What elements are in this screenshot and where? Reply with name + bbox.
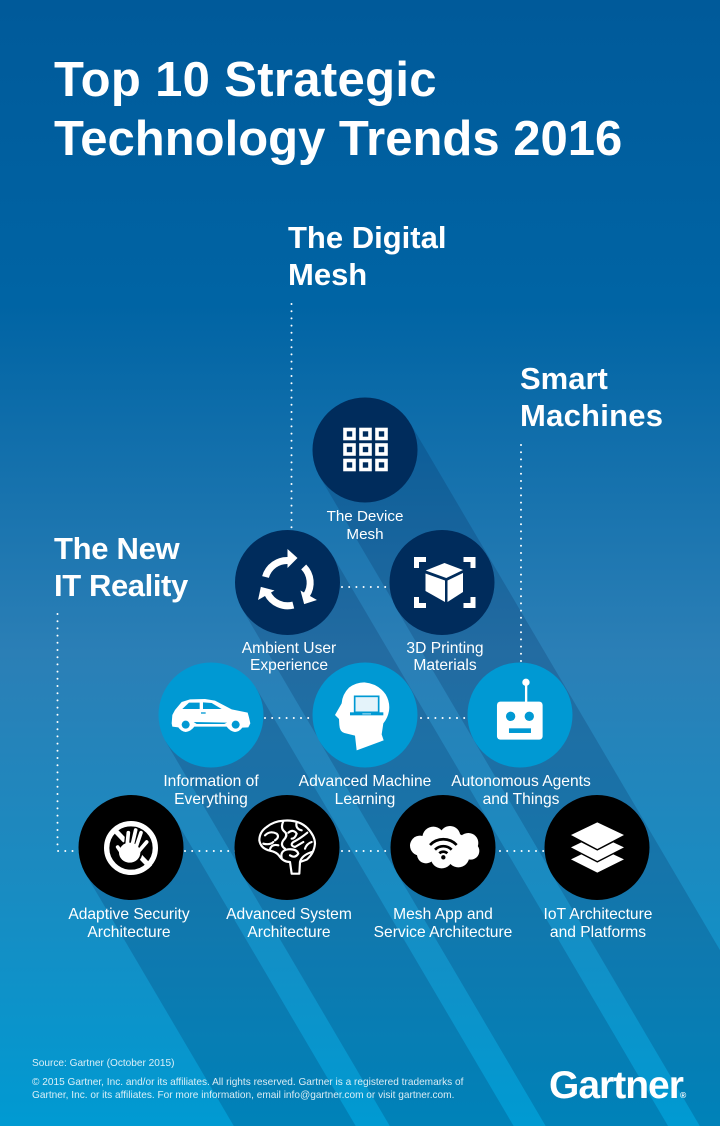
Gartner logo: ® — [680, 1090, 687, 1100]
node: Mesh App and Service Architecture — [374, 795, 512, 941]
node: Ambient User Experience — [235, 530, 340, 674]
node: The Device Mesh — [312, 398, 418, 543]
node: Adaptive Security Architecture: Architecture — [87, 924, 171, 941]
node: IoT Architecture and Platforms: IoT Architecture — [544, 906, 652, 923]
node: Ambient User Experience: Ambient User — [242, 640, 336, 657]
node: 3D Printing Materials — [390, 530, 494, 674]
heading: Smart Machines: Smart — [520, 361, 608, 396]
node: IoT Architecture and Platforms — [544, 795, 652, 941]
copyright note: © 2015 Gartner, Inc. and/or its affiliates. All rights reserved. Gartner is a registered trademarks of — [32, 1077, 464, 1088]
node: Advanced System Architecture — [226, 795, 352, 941]
node: The Device Mesh: Mesh — [346, 526, 384, 543]
node: Adaptive Security Architecture — [68, 795, 190, 941]
heading: The Digital Mesh: The Digital — [288, 220, 446, 255]
heading: The New IT Reality: The New — [54, 531, 181, 566]
node: Advanced Machine Learning — [299, 662, 431, 808]
node: Advanced Machine Learning: Advanced Machine — [299, 773, 431, 790]
node: Advanced System Architecture: Advanced System — [226, 906, 352, 923]
node: Advanced Machine Learning: Learning — [335, 791, 395, 808]
long circle shadows — [86, 423, 720, 1126]
copyright note: Gartner, Inc. or its affiliates. For more information, email info@gartner.com or visit gartner.com. — [32, 1090, 454, 1101]
node: 3D Printing Materials: Materials — [413, 657, 477, 674]
node: Autonomous Agents and Things — [451, 662, 591, 808]
heading: The New IT Reality: IT Reality — [54, 568, 189, 603]
node: Information of Everything: Information of — [163, 773, 259, 790]
source note: Source: Gartner (October 2015) — [32, 1058, 175, 1069]
node: The Device Mesh: The Device — [327, 508, 403, 525]
node: IoT Architecture and Platforms: and Platforms — [550, 924, 646, 941]
node: Mesh App and Service Architecture: Service Architecture — [374, 924, 512, 941]
node: Autonomous Agents and Things: and Things — [483, 791, 560, 808]
node: Information of Everything — [158, 662, 264, 808]
Gartner logo: Gartner — [549, 1064, 684, 1107]
node: Adaptive Security Architecture: Adaptive Security — [68, 906, 190, 923]
node: Mesh App and Service Architecture: Mesh App and — [393, 906, 493, 923]
node: Ambient User Experience: Experience — [250, 657, 328, 674]
heading: The Digital Mesh: Mesh — [288, 257, 367, 292]
heading: Smart Machines: Machines — [520, 398, 663, 433]
title: Technology Trends 2016 — [54, 112, 622, 166]
title: Top 10 Strategic — [54, 53, 437, 107]
node: Advanced System Architecture: Architecture — [247, 924, 331, 941]
node: Autonomous Agents and Things: Autonomous Agents — [451, 773, 591, 790]
dotted connectors — [58, 304, 546, 851]
node: 3D Printing Materials: 3D Printing — [406, 640, 484, 657]
node: Information of Everything: Everything — [174, 791, 248, 808]
